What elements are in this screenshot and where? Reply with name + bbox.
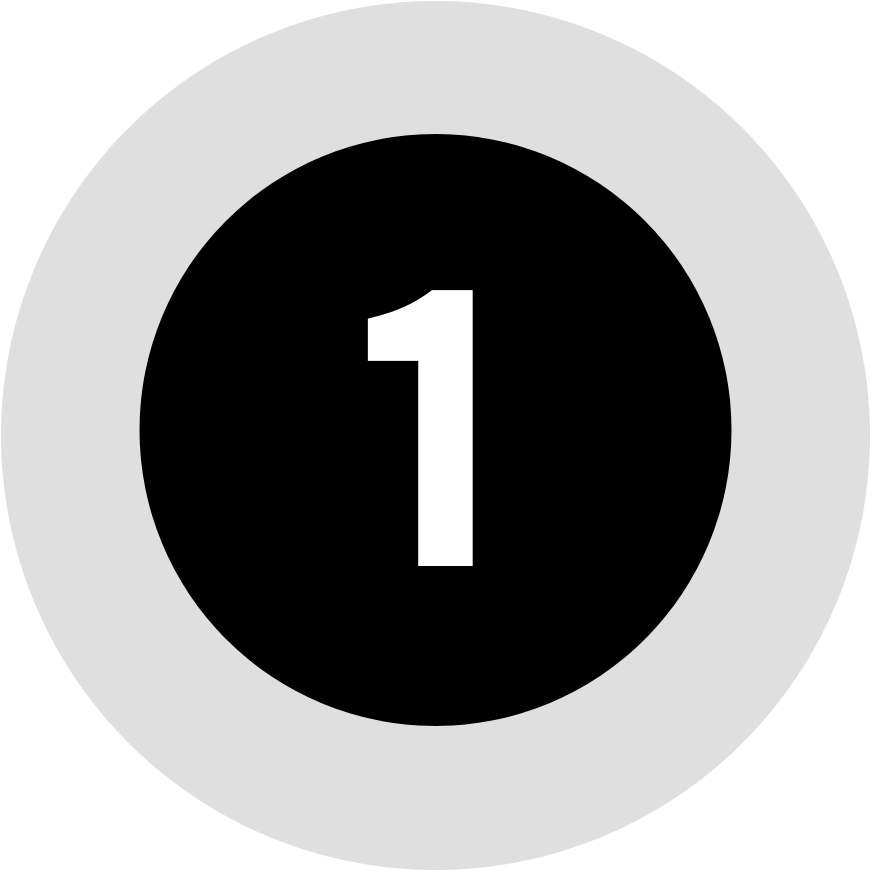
numeral 1: 1 bbox=[328, 89, 548, 754]
inner black circle bbox=[140, 134, 732, 726]
